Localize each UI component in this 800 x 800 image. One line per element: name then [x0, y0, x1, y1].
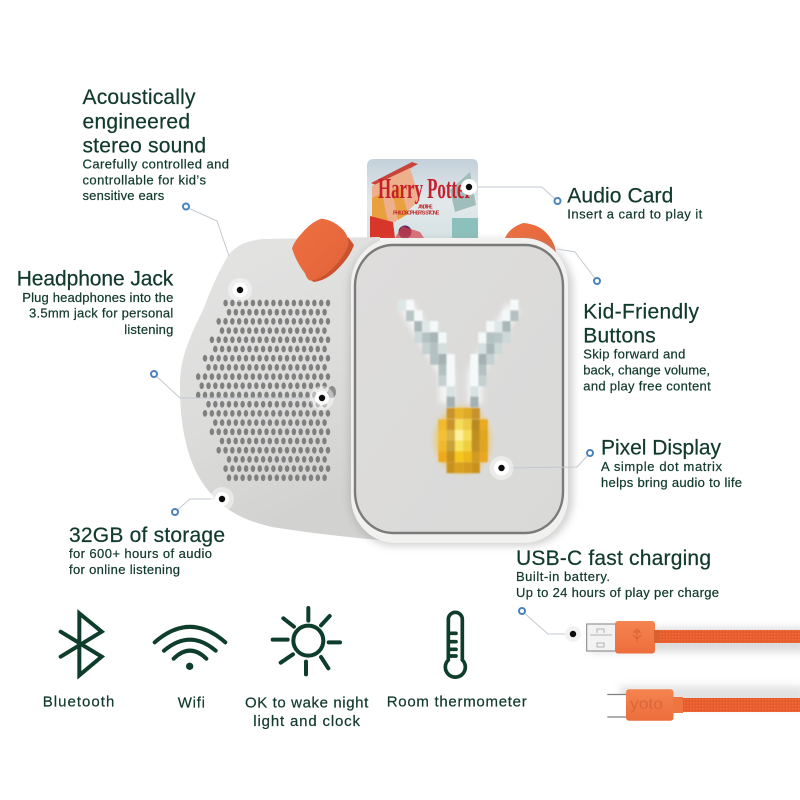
- card title: Harry Potter: [378, 173, 472, 205]
- ring: pixel display: [587, 450, 593, 456]
- label: room thermometer: Room thermometer: [387, 694, 527, 711]
- collar: [654, 630, 659, 643]
- label: bluetooth: Bluetooth: [43, 694, 114, 711]
- label: ok to wake: OK to wake night: [245, 694, 369, 711]
- coin glow: [434, 407, 491, 473]
- housing: [615, 621, 655, 654]
- callout: storage: [69, 524, 225, 577]
- pixel display: [398, 300, 518, 473]
- callout: usb-c charging: [516, 547, 719, 600]
- heading: Pixel Display: [601, 436, 722, 460]
- hotspot: storage: [210, 487, 234, 511]
- wing glow: [407, 307, 513, 403]
- hotspot: pixel display: [490, 456, 514, 480]
- metal plug: [587, 624, 616, 651]
- cable cord: [657, 630, 800, 643]
- heading: USB-C fast charging: [516, 547, 711, 570]
- description: controllable for kid’s: [82, 172, 206, 187]
- audio card: [367, 159, 478, 238]
- heading: [82, 86, 206, 158]
- label: ok to wake: light and clock: [253, 713, 360, 730]
- icon: thermometer: [445, 612, 465, 677]
- description: back, change volume,: [583, 363, 710, 378]
- callout: stereo sound: [82, 86, 229, 203]
- ring: buttons: [594, 278, 600, 284]
- callout: audio card: [567, 184, 703, 221]
- description: for 600+ hours of audio: [69, 546, 212, 561]
- heading: Audio Card: [567, 184, 673, 207]
- description: [22, 290, 173, 337]
- shadow: [620, 686, 800, 708]
- usb symbol: [633, 629, 641, 642]
- description: [516, 569, 719, 600]
- heading: Kid-Friendly: [583, 300, 700, 323]
- hotspot: headphone jack: [310, 386, 334, 410]
- ring: audio card: [554, 198, 560, 204]
- heading: Buttons: [583, 324, 656, 347]
- collar: [673, 697, 683, 713]
- left wing pixels: [398, 300, 455, 407]
- leader lines: [154, 187, 597, 634]
- description: [82, 156, 229, 203]
- face frame: [351, 238, 568, 543]
- cable cord: [682, 698, 800, 712]
- description: 3.5mm jack for personal: [29, 306, 173, 321]
- description: [601, 459, 742, 490]
- label: ok to wake: [245, 694, 369, 730]
- icon: wifi: [155, 627, 225, 670]
- callout: buttons: [583, 300, 711, 394]
- left button: [292, 219, 354, 282]
- description: [69, 546, 212, 577]
- housing: [626, 689, 674, 721]
- description: Carefully controlled and: [82, 156, 229, 171]
- hotspot: cable: [565, 626, 581, 642]
- device body: [180, 237, 380, 540]
- ring: stereo sound: [183, 204, 189, 210]
- face shadow: [349, 240, 573, 546]
- heading: 32GB of storage: [69, 524, 225, 547]
- shadow: [590, 628, 800, 652]
- callout: pixel display: [601, 436, 742, 490]
- description: A simple dot matrix: [601, 459, 722, 474]
- description: Plug headphones into the: [22, 290, 173, 305]
- hotspot: speaker: [228, 278, 252, 302]
- heading: [583, 300, 700, 347]
- ring: headphone jack: [151, 371, 157, 377]
- speaker grille: [198, 303, 330, 478]
- description: [583, 347, 711, 394]
- heading: Acoustically: [82, 86, 196, 109]
- description: listening: [124, 322, 173, 337]
- description: Skip forward and: [583, 347, 685, 362]
- right wing pixels: [470, 300, 518, 407]
- card subtitle: AND THE: [418, 204, 433, 210]
- description: Built-in battery.: [516, 569, 610, 584]
- card subtitle: PHILOSOPHER'S STONE: [393, 210, 440, 216]
- headphone jack hole: [328, 386, 336, 398]
- coin pixels: [438, 408, 488, 473]
- ring: storage: [172, 509, 178, 515]
- ring: usb: [519, 608, 525, 614]
- icon: bluetooth: [61, 613, 102, 675]
- description: Up to 24 hours of play per charge: [516, 585, 719, 600]
- label: wifi: Wifi: [178, 694, 205, 712]
- description: sensitive ears: [82, 188, 165, 203]
- description: helps bring audio to life: [601, 475, 742, 490]
- heading: Headphone Jack: [17, 268, 174, 291]
- usb-c cable: [607, 686, 800, 721]
- heading: stereo sound: [82, 135, 206, 158]
- description: Insert a card to play it: [567, 206, 703, 221]
- heading: engineered: [82, 110, 190, 133]
- icon: sun: [273, 608, 340, 674]
- logo: yoto: [630, 696, 663, 713]
- hotspot: audio card: [461, 179, 477, 195]
- usb-a cable: [587, 621, 800, 654]
- speaker device: [180, 219, 573, 546]
- description: and play free content: [583, 379, 711, 394]
- metal plug: [607, 694, 626, 718]
- description: for online listening: [69, 562, 180, 577]
- face inner ring: [355, 245, 563, 533]
- right button: [505, 223, 556, 258]
- callout: headphone jack: [17, 268, 174, 337]
